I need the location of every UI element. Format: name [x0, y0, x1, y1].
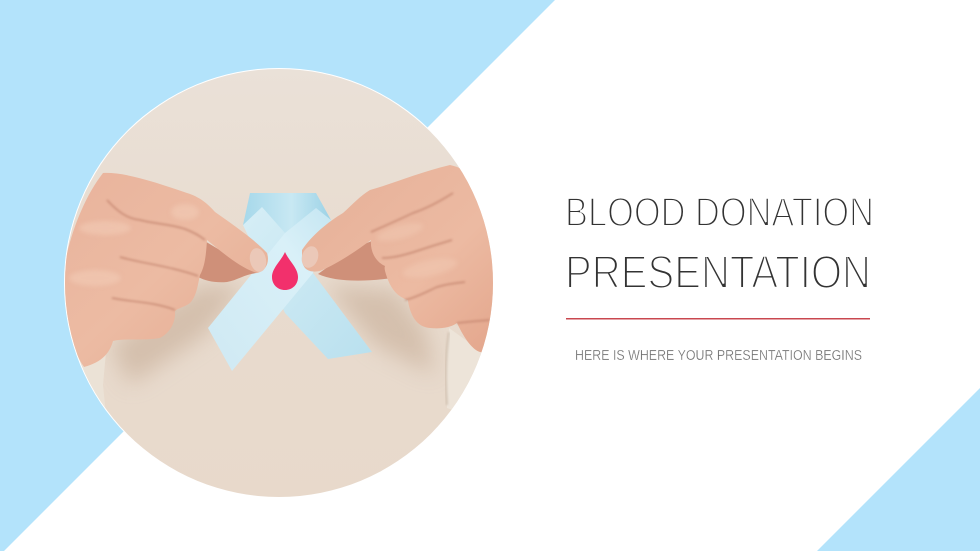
right knuckle highlights — [380, 225, 454, 274]
left finger creases — [107, 200, 205, 310]
photo rim — [64, 68, 494, 498]
ribbon band to lower right — [243, 207, 372, 359]
ribbon — [208, 193, 372, 371]
right thumb nail — [302, 246, 318, 268]
right thumb base — [318, 240, 392, 281]
right finger creases — [371, 193, 490, 323]
right hand silhouette — [302, 165, 500, 356]
photo backdrop: shirt — [60, 65, 500, 501]
left hand — [60, 173, 268, 367]
icon: blood drop — [272, 252, 298, 290]
ribbon band to lower left — [208, 208, 331, 371]
left knuckle highlights — [69, 204, 199, 286]
right hand — [299, 165, 500, 356]
right sleeve — [446, 328, 481, 410]
left sleeve — [83, 356, 106, 406]
circular photo: hands holding ribbon — [60, 65, 500, 501]
sleeve seam — [446, 332, 449, 405]
left hand silhouette — [60, 173, 268, 367]
title line 1: BLOOD DONATION — [565, 189, 874, 235]
ribbon loop back — [243, 193, 331, 233]
red divider — [566, 318, 870, 320]
left thumb base — [198, 240, 257, 282]
subtitle: HERE IS WHERE YOUR PRESENTATION BEGINS — [575, 348, 862, 364]
title line 2: PRESENTATION — [565, 246, 871, 298]
background: bottom-right blue triangle — [817, 388, 980, 551]
left thumb nail — [250, 248, 266, 272]
background: top-left blue diagonal — [0, 0, 555, 551]
shadows under hands — [110, 285, 435, 385]
